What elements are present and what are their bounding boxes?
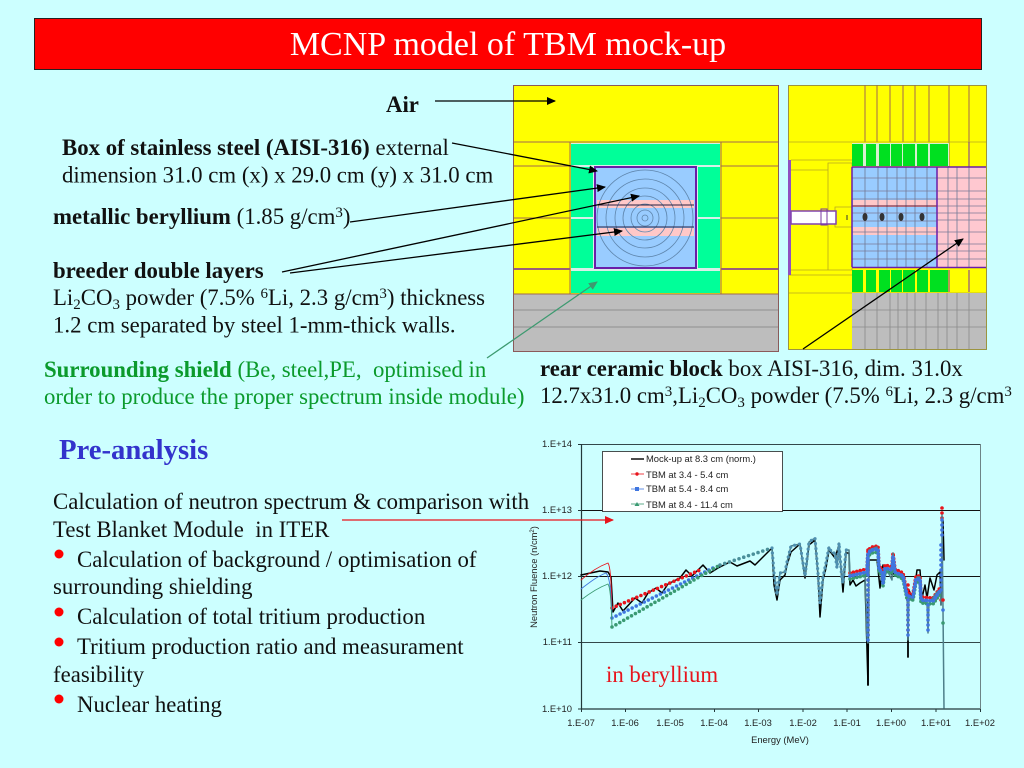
legend: TBM at 5.4 - 8.4 cm xyxy=(646,483,729,494)
legend: TBM at 8.4 - 11.4 cm xyxy=(646,499,733,510)
chart gridlines and axes xyxy=(578,444,980,712)
label: breeder double layers: 3 xyxy=(112,297,120,313)
callout arrows xyxy=(282,101,963,358)
text block: analysis list: surrounding shielding xyxy=(53,574,252,599)
text block: analysis list xyxy=(53,489,530,717)
label: rear ceramic block: ,Li xyxy=(672,383,698,408)
y axis tick labels: 1.E+13 xyxy=(542,504,572,515)
curve: high energy TBM band xyxy=(772,515,945,708)
label: rear ceramic block: 6 xyxy=(885,384,893,400)
label: rear ceramic block: CO xyxy=(706,383,737,408)
label: rear ceramic block: rear ceramic block box AISI-316, dim. 31.0x xyxy=(540,356,963,381)
text block: analysis list: Calculation of neutron spectrum & comparison with xyxy=(53,489,530,514)
y axis tick labels: 1.E+10 xyxy=(542,703,572,714)
label: rear ceramic block: 12.7x31.0 cm xyxy=(540,383,665,408)
y axis title: Neutron Fluence (n/cm xyxy=(528,533,539,628)
x axis tick labels: 1.E+02 xyxy=(965,717,995,728)
text block: analysis list: Calculation of total tritium production xyxy=(77,604,426,629)
label: breeder double layers: 6 xyxy=(260,286,268,302)
label: surrounding shield: Surrounding shield (Be, steel,PE, optimised in xyxy=(44,357,486,382)
y axis tick labels xyxy=(542,438,572,714)
curve: TBM 5.4-8.4 cm blue xyxy=(581,567,715,618)
label: metallic beryllium: metallic beryllium (1.85 g/cm xyxy=(53,204,335,229)
y axis tick labels: 1.E+12 xyxy=(542,570,572,581)
label: breeder double layers: ) thickness xyxy=(387,285,485,310)
x axis tick labels: 1.E-04 xyxy=(700,717,728,728)
x axis tick labels xyxy=(567,717,995,728)
label: in beryllium: in beryllium xyxy=(606,662,718,687)
x axis tick labels: 1.E-07 xyxy=(567,717,595,728)
text block: analysis list: Test Blanket Module in ITER xyxy=(53,517,330,542)
title banner: MCNP model of TBM mock-up xyxy=(290,26,726,63)
label: rear ceramic block: 3 xyxy=(665,384,672,400)
title banner xyxy=(34,18,982,70)
text block: analysis list: Nuclear heating xyxy=(77,692,222,717)
legend xyxy=(602,452,782,512)
x axis tick labels: 1.E-06 xyxy=(611,717,639,728)
legend: TBM at 3.4 - 5.4 cm xyxy=(646,469,729,480)
diagram: side cross-section of mock-up xyxy=(788,85,986,350)
label: breeder double layers: 2 xyxy=(73,297,81,313)
label: rear ceramic block: 2 xyxy=(698,395,706,411)
y axis title: 2 xyxy=(530,529,536,533)
label: box of stainless steel: dimension 31.0 cm (x) x 29.0 cm (y) x 31.0 cm xyxy=(62,162,493,188)
y axis tick labels: 1.E+11 xyxy=(543,636,572,647)
label: air: Air xyxy=(386,92,419,117)
y axis tick labels: 1.E+14 xyxy=(542,438,572,449)
label: rear ceramic block: powder (7.5% xyxy=(745,383,885,408)
label: breeder double layers: powder (7.5% xyxy=(120,285,260,310)
label: breeder double layers: 1.2 cm separated by steel 1-mm-thick walls. xyxy=(53,312,456,338)
label: box of stainless steel: Box of stainless steel (AISI-316) external xyxy=(62,135,449,160)
text block: analysis list: feasibility xyxy=(53,662,145,687)
label: metallic beryllium: ) xyxy=(343,204,350,229)
label: rear ceramic block: 3 xyxy=(737,395,745,411)
chart: neutron spectrum xyxy=(528,438,995,745)
label: breeder double layers: Li, 2.3 g/cm xyxy=(268,285,380,310)
diagram: front cross-section of mock-up xyxy=(514,86,778,352)
x axis tick labels: 1.E-01 xyxy=(833,717,861,728)
label: breeder double layers: breeder double layers xyxy=(53,258,264,283)
label: rear ceramic block: Li, 2.3 g/cm xyxy=(893,383,1005,408)
x axis tick labels: 1.E-02 xyxy=(789,717,817,728)
x axis tick labels: 1.E+00 xyxy=(876,717,906,728)
x axis tick labels: 1.E-05 xyxy=(656,717,684,728)
label: metallic beryllium: 3 xyxy=(335,205,343,221)
label: rear ceramic block: 3 xyxy=(1004,384,1012,400)
curve: TBM 3.4-5.4 cm red xyxy=(581,508,944,640)
curve: TBM 8.4-11.4 cm green xyxy=(581,548,772,627)
label: surrounding shield: order to produce the proper spectrum inside module) xyxy=(44,384,524,409)
label: breeder double layers: CO xyxy=(81,285,112,310)
arrow: spectrum comparison to chart xyxy=(342,519,613,521)
label: breeder double layers: Li xyxy=(53,285,73,310)
text block: analysis list: Calculation of background / optimisation of xyxy=(77,547,477,572)
heading: pre-analysis: Pre-analysis xyxy=(59,434,208,466)
y axis title: ) xyxy=(528,526,539,529)
legend: Mock-up at 8.3 cm (norm.) xyxy=(646,453,756,464)
label: breeder double layers: 3 xyxy=(379,286,387,302)
curve: mock-up black xyxy=(581,520,944,685)
x axis tick labels: 1.E+01 xyxy=(921,717,951,728)
x axis tick labels: 1.E-03 xyxy=(744,717,772,728)
x axis title: Energy (MeV) xyxy=(751,734,809,745)
text block: analysis list: Tritium production ratio and measurament xyxy=(77,634,464,659)
